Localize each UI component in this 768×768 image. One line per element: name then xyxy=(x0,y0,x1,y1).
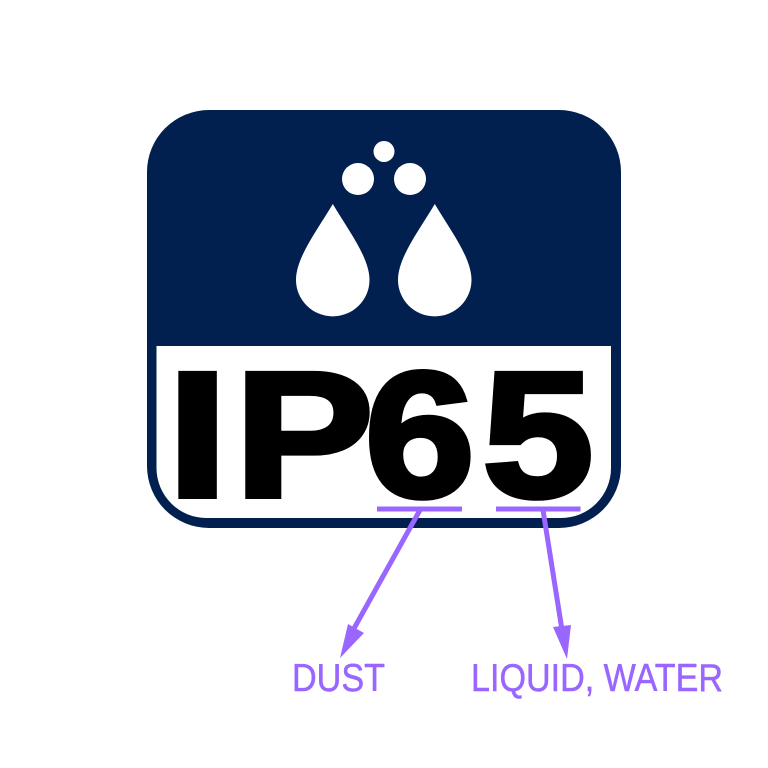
panel: IP65 badge xyxy=(147,110,621,535)
heading: IP65: 6 xyxy=(364,336,475,535)
arrow: 5 digit to liquid and water xyxy=(496,506,580,659)
heading: IP65: P xyxy=(234,336,374,535)
badge white label area xyxy=(156,346,611,518)
heading: IP65: 5 xyxy=(482,335,594,535)
label: dust: DUST xyxy=(292,657,385,700)
heading: IP65: I xyxy=(166,335,229,534)
icon: three small bubbles xyxy=(342,141,426,195)
icon: right water drop xyxy=(398,204,472,316)
label: liquid, water: LIQUID, WATER xyxy=(471,657,723,700)
icon: left water drop xyxy=(296,204,370,316)
arrow: 6 digit to dust xyxy=(340,506,462,658)
badge navy background xyxy=(147,110,621,528)
heading: IP65 xyxy=(166,335,594,535)
